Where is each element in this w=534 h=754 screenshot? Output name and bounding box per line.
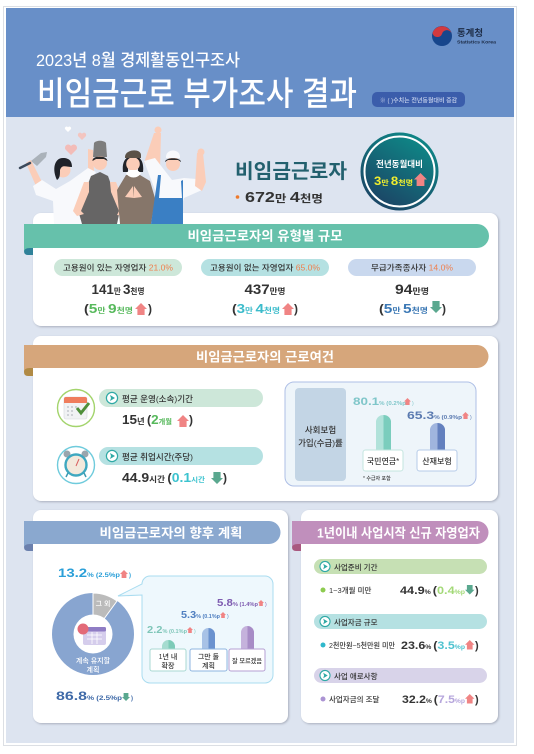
- bar: plan to quit: 그만 둘: [198, 652, 220, 661]
- bar: expand within a year: 1년 내: [159, 652, 177, 661]
- item: business funds: 2천만원~5천만원 미만: [329, 640, 395, 650]
- total count: 672 만 4천명: [245, 189, 323, 206]
- donut chart: 그 외: [96, 599, 110, 608]
- section: working conditions: [24, 336, 498, 501]
- item: business difficulties: 사업자금의 조달: [329, 694, 379, 704]
- column: own-account workers: 437만명: [244, 281, 286, 297]
- heading: non-wage workers: 비임금근로자: [235, 160, 347, 183]
- main title: 비임금근로 부가조사 결과: [37, 75, 357, 112]
- bar: expand within a year: [147, 625, 196, 671]
- subtitle: 2023년 8월 경제활동인구조사: [36, 51, 240, 70]
- column: own-account workers: [201, 259, 329, 316]
- value: other share: 13.2 % (2.5%p: [58, 566, 120, 580]
- value: other share: ): [129, 573, 131, 579]
- value: national pension rate: 80.1 % (0.2%p: [353, 396, 406, 408]
- donut chart: 계획: [87, 665, 99, 674]
- worker: blue apron: [144, 126, 206, 224]
- item: business difficulties: 사업 애로사항: [334, 671, 378, 681]
- value: national pension rate: ): [412, 401, 414, 407]
- ribbon: type scale: [24, 224, 489, 255]
- bar: plan to quit: [181, 610, 229, 671]
- item: preparation period: 1~3개월 미만: [329, 585, 372, 595]
- illustration: four workers: [20, 126, 206, 224]
- item: average working hours: [99, 447, 263, 485]
- item: business funds: ): [475, 640, 479, 652]
- item: preparation period: 44.9 % (0.4 %p: [400, 585, 465, 597]
- section: type scale: [24, 224, 489, 316]
- badge: year-on-year change: 전년동월대비: [376, 159, 423, 169]
- item: average working hours: ): [223, 471, 227, 485]
- item: business difficulties: ): [475, 694, 479, 706]
- ribbon: new self-employed: 1년이내 사업시작 신규 자영업자: [317, 526, 480, 540]
- item: business difficulties: 32.2 % (7.5 %p: [402, 694, 465, 706]
- worker: white chef: [20, 149, 96, 224]
- note pill: [372, 92, 465, 107]
- panel: social insurance: [285, 382, 476, 486]
- item: business funds: [314, 614, 487, 652]
- logo: Statistics Korea: [432, 26, 496, 46]
- bar: expand within a year: 2.2 % (0.1%p: [147, 625, 187, 636]
- bar: do not know: 5.8 % (1.4%p: [217, 598, 258, 609]
- column: unpaid family workers: ): [442, 302, 446, 316]
- panel: social insurance: 사회보험: [305, 425, 336, 435]
- value: industrial accident rate: 65.3 % (0.9%p: [407, 410, 462, 422]
- column: employers with employees: ): [148, 302, 152, 316]
- callout: detail of other plans: [118, 576, 273, 683]
- item: average operating period: 15년 (2개월: [122, 412, 172, 427]
- bar: plan to quit: 5.3% (0.1%p: [181, 610, 220, 621]
- item: average operating period: ): [189, 413, 193, 427]
- bar: industrial accident insurance: [417, 423, 457, 471]
- item: business funds: 23.6 % (3.5 %p: [401, 640, 465, 652]
- value: continue share: 86.8 % (2.5%p: [56, 689, 122, 703]
- badge: year-on-year change: 3만 8천명: [374, 176, 413, 188]
- item: average working hours: 44.9시간 (0.1시간: [122, 470, 206, 485]
- bar: national pension: [363, 415, 403, 471]
- item: preparation period: ): [475, 585, 479, 597]
- ribbon: future plans: 비임금근로자의 향후 계획: [100, 526, 242, 540]
- icon: hearts: [65, 127, 86, 155]
- bar: industrial accident insurance: 산재보험: [422, 456, 452, 466]
- column: own-account workers: (3만 4천명: [232, 301, 280, 316]
- item: preparation period: 사업준비 기간: [334, 562, 378, 572]
- section: new self-employed within one year: [292, 510, 498, 723]
- worker: dark chef: [73, 141, 127, 224]
- column: employers with employees: [54, 259, 182, 316]
- value: continue share: ): [131, 696, 133, 702]
- ribbon: type scale: 비임금근로자의 유형별 규모: [188, 228, 343, 244]
- column: unpaid family workers: [348, 259, 476, 316]
- icon: alarm clock: [58, 446, 94, 484]
- column: employers with employees: (5만 9천명: [84, 301, 133, 316]
- item: average working hours: 평균 취업시간(주당): [122, 452, 193, 462]
- card: type scale panel: [33, 213, 498, 326]
- bar: do not know: ): [265, 602, 267, 608]
- header band: [6, 8, 514, 117]
- column: employers with employees: 고용원이 있는 자영업자 21.0%: [63, 262, 173, 272]
- bar: do not know: [217, 598, 267, 671]
- column: employers with employees: 141만 3천명: [92, 281, 144, 297]
- ribbon: new self-employed: [292, 521, 488, 551]
- logo: Statistics Korea: Statistics Korea: [457, 40, 496, 44]
- donut chart: 계속 유지할: [76, 656, 111, 665]
- badge: year-on-year change: [360, 132, 438, 210]
- logo: Statistics Korea: 통계청: [457, 27, 483, 38]
- item: business difficulties: [314, 668, 487, 706]
- icon: calendar with check: [58, 390, 94, 426]
- column: own-account workers: 고용원이 없는 자영업자 65.0%: [210, 262, 320, 272]
- ribbon: working conditions: 비임금근로자의 근로여건: [196, 350, 334, 364]
- bar: plan to quit: ): [227, 614, 229, 620]
- value: industrial accident rate: ): [470, 415, 472, 421]
- donut chart: [52, 593, 134, 675]
- icon: calendar and clock: [78, 624, 106, 645]
- item: business funds: 사업자금 규모: [334, 617, 378, 627]
- bar: expand within a year: 확장: [162, 661, 175, 670]
- item: average operating period: [99, 389, 263, 427]
- section: future plans: [24, 510, 288, 723]
- note pill: ※ ( )수치는 전년동월대비 증감: [380, 96, 458, 104]
- ribbon: working conditions: [24, 345, 488, 376]
- footnote: * 수급자 포함: [363, 475, 391, 482]
- column: own-account workers: ): [294, 302, 298, 316]
- column: unpaid family workers: 94만명: [395, 281, 429, 297]
- item: average operating period: 평균 운영(소속)기간: [122, 394, 193, 404]
- column: unpaid family workers: 무급가족종사자 14.0%: [371, 262, 453, 272]
- bar: plan to quit: 계획: [202, 661, 215, 670]
- worker: brown outfit: [117, 150, 157, 224]
- bar: expand within a year: ): [194, 629, 196, 635]
- bar: do not know: 잘 모르겠음: [232, 656, 262, 665]
- item: preparation period: [314, 559, 487, 597]
- bar: national pension: 국민연금*: [367, 456, 399, 466]
- panel: social insurance: 가입(수급)률: [298, 438, 343, 448]
- ribbon: future plans: [24, 521, 280, 551]
- column: unpaid family workers: (5만 5천명: [379, 301, 428, 316]
